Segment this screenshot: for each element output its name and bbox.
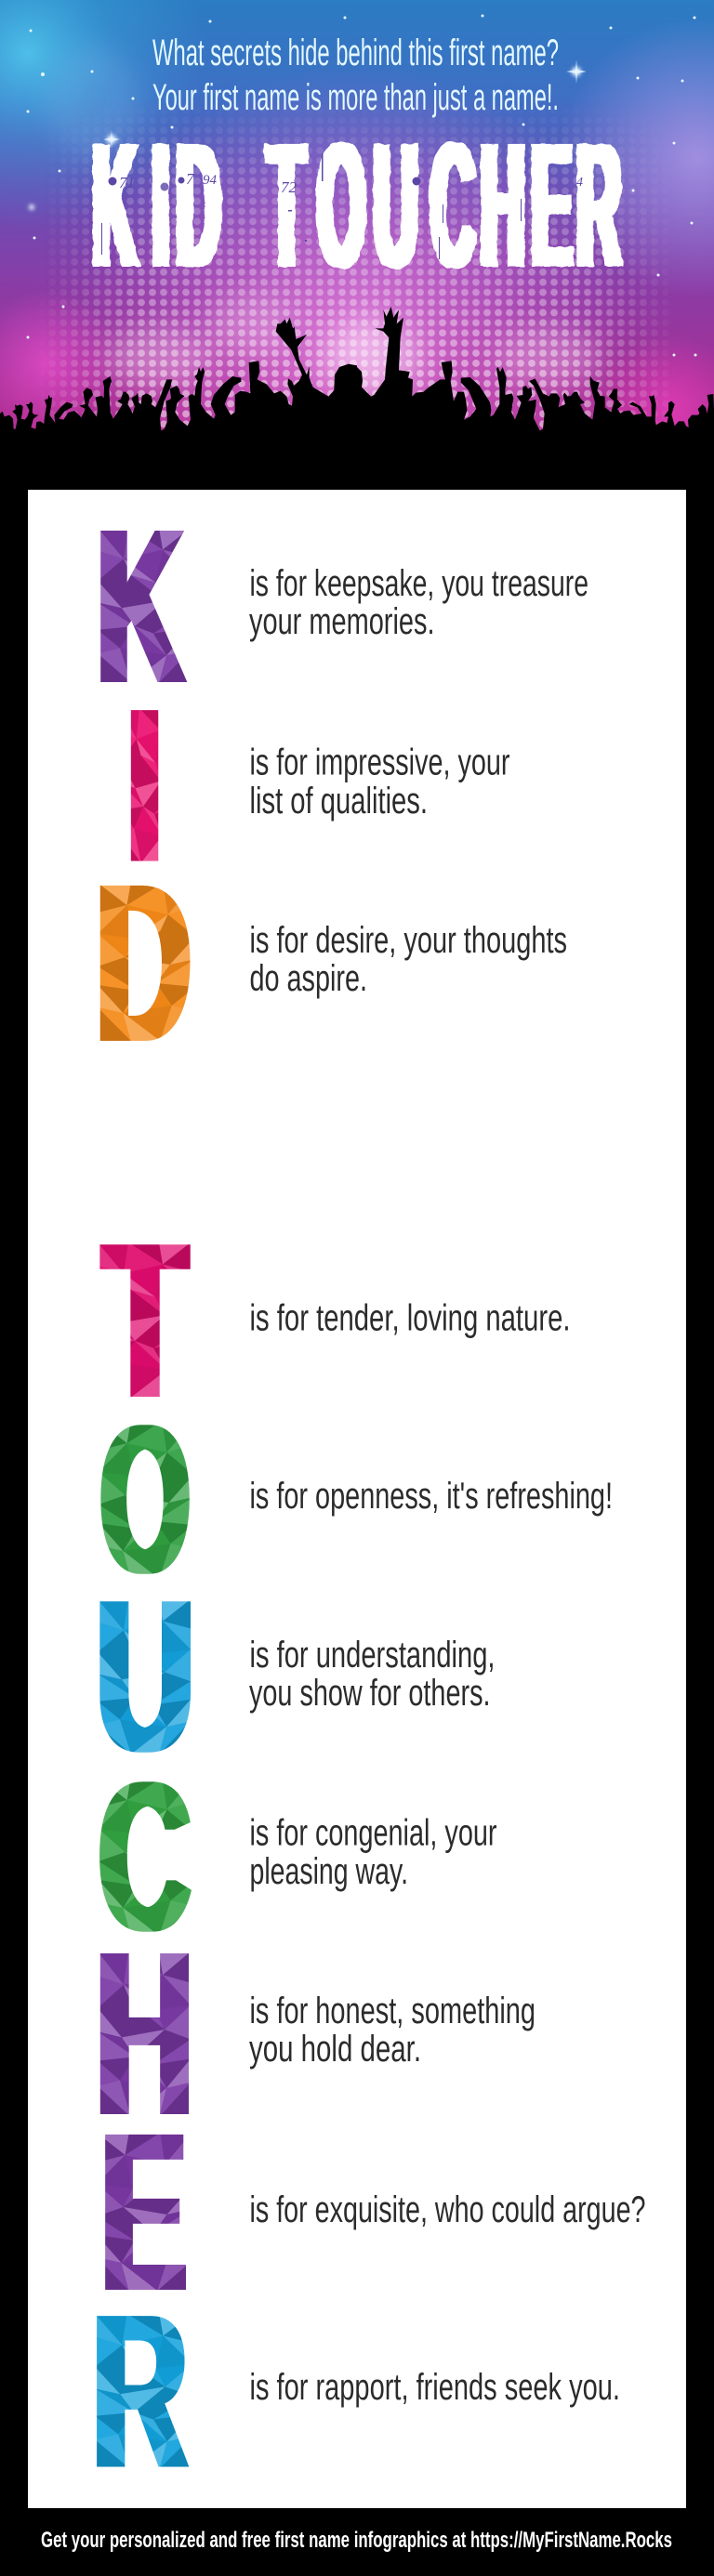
- text: C line: [249, 1812, 496, 1892]
- text: H line: is for honest, something: [249, 1991, 536, 2031]
- letter O: [100, 1425, 190, 1574]
- text: U line: is for understanding,: [249, 1635, 495, 1676]
- header concert background: [0, 0, 714, 431]
- text: I line: [249, 742, 509, 821]
- text: U line: you show for others.: [249, 1673, 491, 1714]
- white content panel: [28, 490, 686, 2508]
- distress marks on the title: 4: [576, 176, 583, 190]
- text: K line: is for keepsake, you treasure: [249, 563, 588, 604]
- letter D: [100, 885, 190, 1041]
- header tagline: [152, 33, 559, 118]
- text: D line: [249, 920, 567, 999]
- text: C line: is for congenial, your: [249, 1812, 496, 1853]
- distress marks on the title: 94: [203, 173, 218, 188]
- letter E: [105, 2134, 186, 2290]
- letter C: [99, 1781, 192, 1932]
- letter K: [100, 531, 188, 682]
- letter I: [130, 710, 158, 861]
- text: I line: is for impressive, your: [249, 742, 509, 782]
- letter T: [99, 1244, 191, 1397]
- distress marks on the title: 71: [119, 174, 135, 191]
- stars and sparkles: [26, 15, 697, 357]
- title: KID TOUCHER: KID TOUCHER: [93, 107, 621, 305]
- text: K line: your memories.: [249, 601, 435, 642]
- text: H line: you hold dear.: [249, 2029, 421, 2070]
- text: I line: list of qualities.: [249, 781, 428, 821]
- text: D line: do aspire.: [249, 958, 367, 999]
- text: U line: [249, 1635, 495, 1714]
- text: D line: is for desire, your thoughts: [249, 920, 567, 961]
- text: T line: is for tender, loving nature.: [249, 1297, 571, 1338]
- letter U: [99, 1601, 191, 1753]
- crowd silhouette: [0, 307, 714, 497]
- distress marks on the title: [101, 153, 583, 259]
- letter H: [100, 1953, 190, 2114]
- distress marks on the title: 72: [281, 178, 298, 196]
- text: K line: [249, 563, 588, 642]
- letter R: [97, 2316, 190, 2466]
- distress marks on the title: 7: [186, 170, 195, 188]
- text: H line: [249, 1991, 536, 2070]
- text: C line: pleasing way.: [249, 1851, 408, 1892]
